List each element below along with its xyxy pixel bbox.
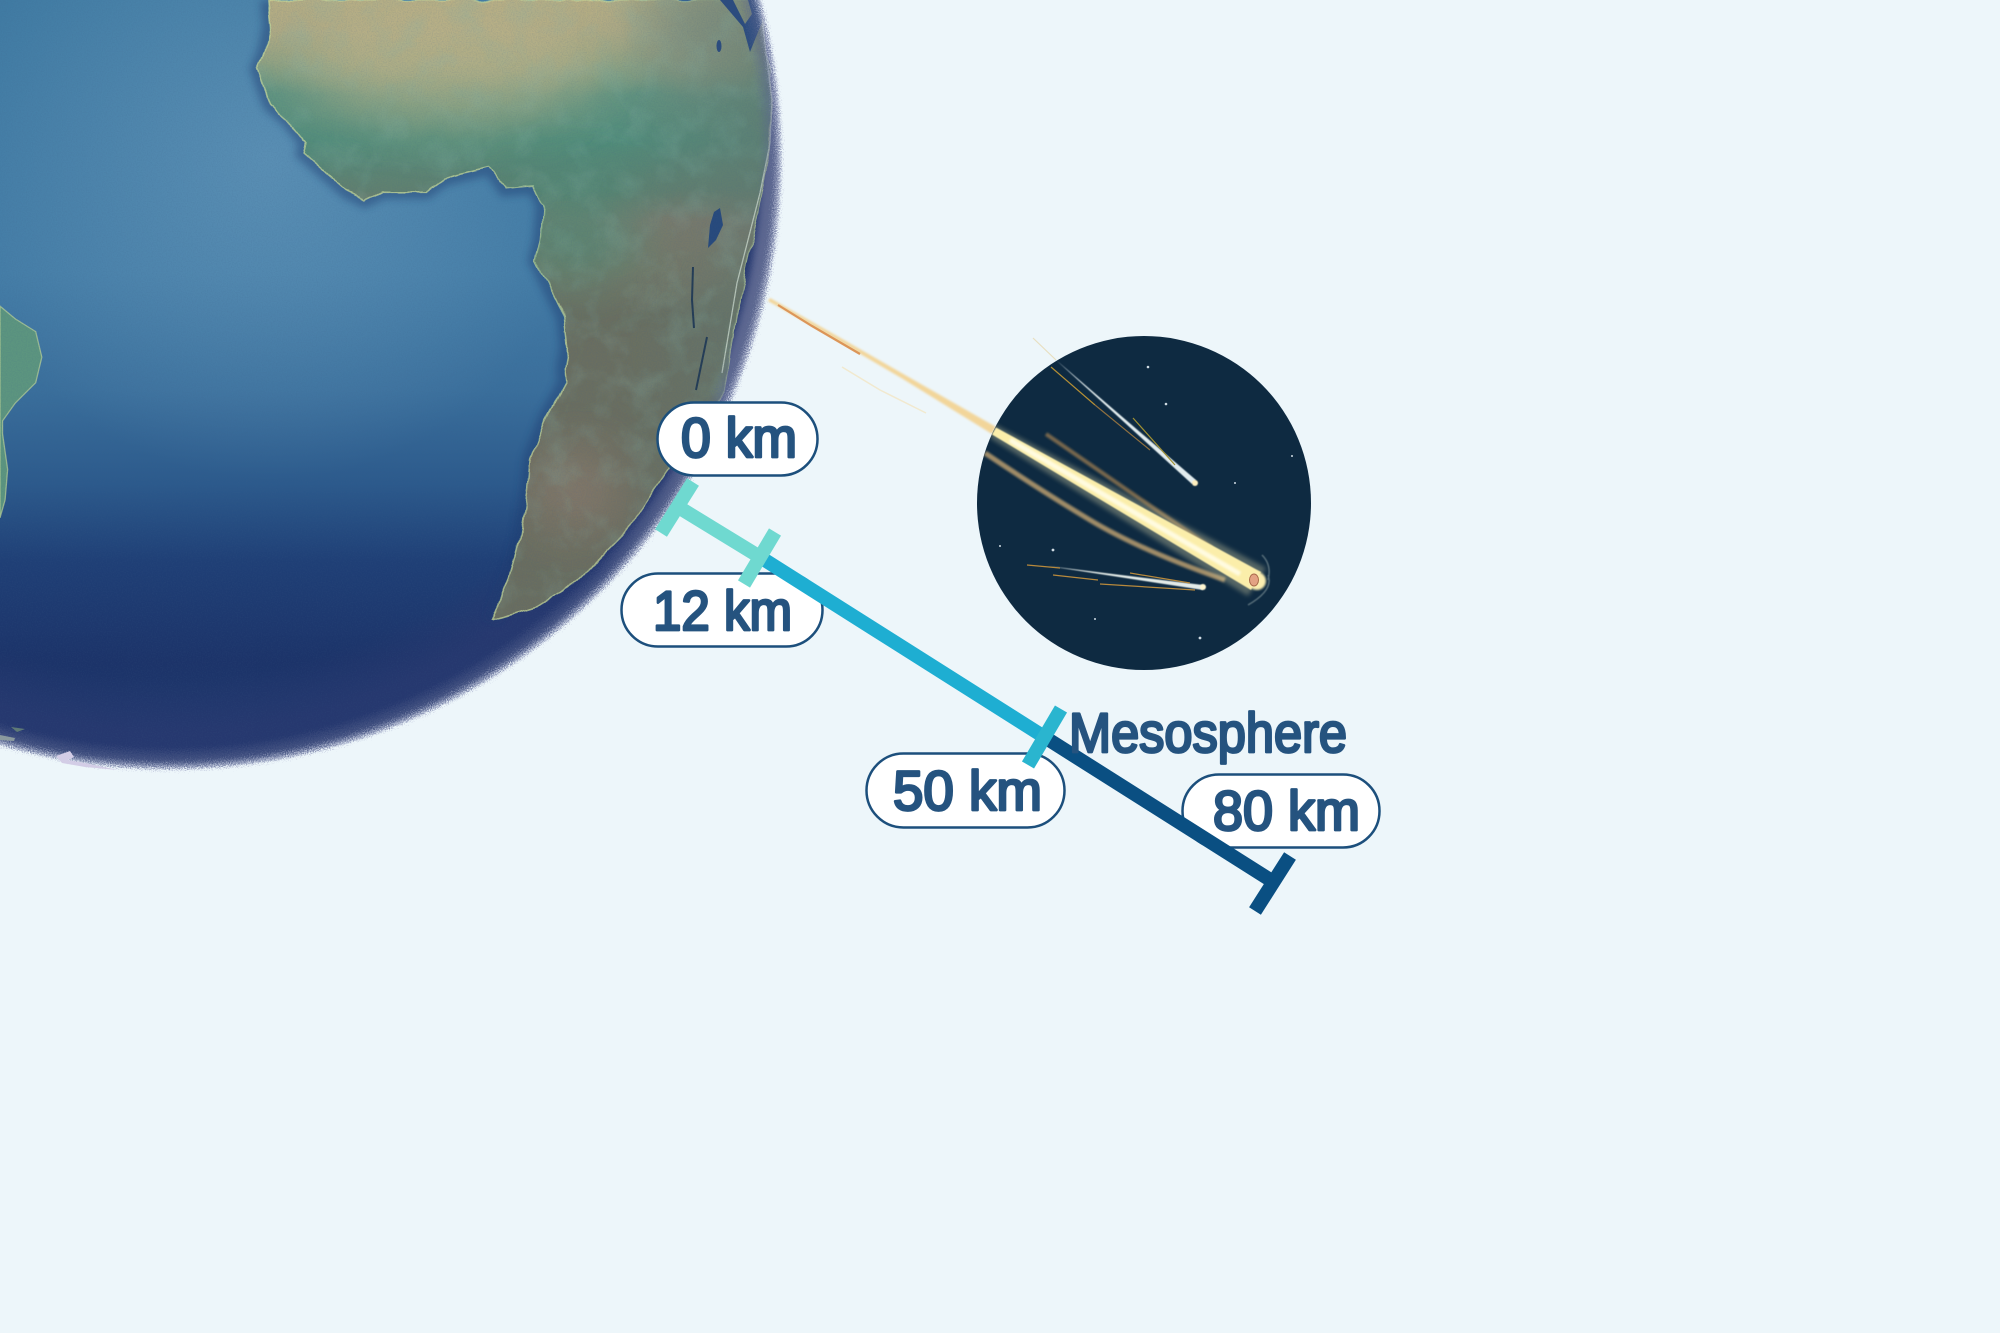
altitude label: 12 km: 12 km <box>653 579 792 642</box>
altitude label: 80 km <box>1182 774 1380 848</box>
ocean <box>0 0 790 780</box>
atmosphere rim <box>0 0 795 783</box>
main meteor <box>990 424 1269 605</box>
faint trail <box>1046 434 1212 548</box>
Antarctic ice fragments <box>0 727 118 770</box>
continent: Africa <box>250 0 790 640</box>
upper meteor <box>1051 360 1198 486</box>
tick: 80 km <box>1255 856 1290 911</box>
segment: troposphere <box>675 505 760 557</box>
rift lakes <box>692 267 707 390</box>
tick: 12 km <box>744 532 775 584</box>
inset: meteors in night sky <box>977 336 1311 670</box>
small lake <box>716 40 722 52</box>
secondary trail <box>985 453 1225 580</box>
tick: 50 km <box>1028 709 1061 765</box>
altitude label: 80 km: 80 km <box>1213 779 1360 842</box>
continent: South America <box>0 306 42 518</box>
limb highlight line <box>722 20 772 373</box>
tick: 0 km <box>661 482 693 533</box>
heading: Mesosphere: Mesosphere <box>1069 701 1347 764</box>
stars <box>999 366 1293 639</box>
altitude label: 0 km <box>658 402 818 476</box>
altitude label: 50 km: 50 km <box>893 759 1042 822</box>
altitude label: 50 km <box>866 754 1064 828</box>
altitude label: 0 km: 0 km <box>681 406 797 469</box>
segment: stratosphere <box>760 557 1046 738</box>
meteor trail outside inset <box>768 298 1056 434</box>
globe <box>0 0 795 783</box>
Lake Victoria <box>708 208 723 248</box>
Red Sea <box>720 0 762 52</box>
altitude scale bar <box>661 482 1290 911</box>
altitude label: 12 km <box>622 574 822 646</box>
surface grain <box>0 0 772 620</box>
segment: mesosphere <box>1046 738 1272 881</box>
lower meteor <box>1027 565 1206 590</box>
